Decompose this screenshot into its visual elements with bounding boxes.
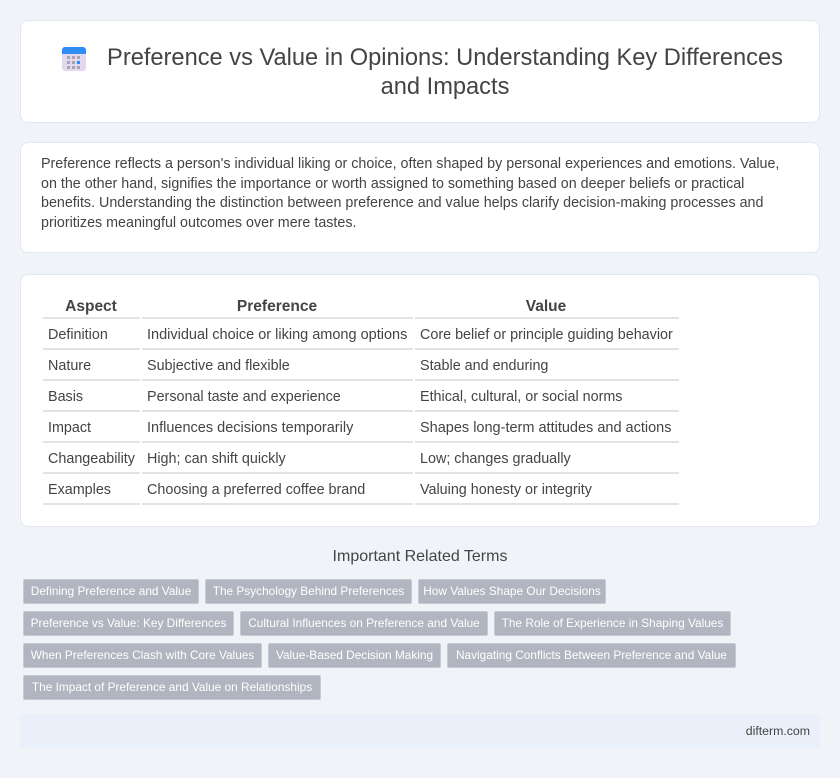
related term tags: When Preferences Clash with Core Values bbox=[31, 648, 254, 662]
intro text: on the other hand, signifies the importance or worth assigned to something based on deeper beliefs or practical bbox=[41, 176, 744, 192]
comparison table: Personal taste and experience bbox=[147, 389, 341, 405]
comparison table: Basis bbox=[48, 389, 83, 405]
comparison table: Low; changes gradually bbox=[420, 451, 571, 467]
related term tags: Preference vs Value: Key Differences bbox=[31, 616, 226, 630]
comparison table bbox=[43, 298, 679, 505]
related term tags: The Role of Experience in Shaping Values bbox=[502, 616, 723, 630]
comparison table: Changeability bbox=[48, 451, 135, 467]
table header: Value: Value bbox=[526, 298, 566, 315]
comparison table: Core belief or principle guiding behavior bbox=[420, 327, 673, 343]
comparison table panel bbox=[20, 274, 820, 527]
related terms heading: Important Related Terms bbox=[333, 548, 507, 565]
related term tags bbox=[23, 579, 736, 700]
intro panel bbox=[20, 142, 820, 253]
row: Definition: Definition bbox=[48, 327, 108, 343]
icon: calendar bbox=[62, 47, 86, 71]
comparison table: Shapes long-term attitudes and actions bbox=[420, 420, 671, 436]
related term tags: Defining Preference and Value bbox=[31, 584, 191, 598]
comparison table: Nature bbox=[48, 358, 91, 374]
footer source text: difterm.com bbox=[746, 724, 810, 738]
related term tags: How Values Shape Our Decisions bbox=[423, 584, 601, 598]
comparison table: Choosing a preferred coffee brand bbox=[147, 482, 365, 498]
table header: Aspect: Aspect bbox=[65, 298, 117, 315]
comparison table: Examples bbox=[48, 482, 111, 498]
intro text: prioritizes meaningful outcomes over mere tastes. bbox=[41, 215, 356, 231]
related term tags: The Psychology Behind Preferences bbox=[213, 584, 404, 598]
table header: Preference: Preference bbox=[237, 298, 317, 315]
comparison table: Impact bbox=[48, 420, 91, 436]
related term tags: Cultural Influences on Preference and Value bbox=[248, 616, 480, 630]
intro text bbox=[41, 156, 779, 231]
footer bar bbox=[20, 714, 820, 748]
title: Preference vs Value in Opinions: Understanding Key Differences and Impacts bbox=[107, 45, 783, 100]
comparison table: Influences decisions temporarily bbox=[147, 420, 353, 436]
comparison table: Valuing honesty or integrity bbox=[420, 482, 592, 498]
comparison table: Stable and enduring bbox=[420, 358, 548, 374]
comparison table: High; can shift quickly bbox=[147, 451, 286, 467]
comparison table: Individual choice or liking among options bbox=[147, 327, 407, 343]
related term tags: Value-Based Decision Making bbox=[276, 648, 433, 662]
comparison table: Subjective and flexible bbox=[147, 358, 290, 374]
related term tags: The Impact of Preference and Value on Relationships bbox=[32, 680, 312, 694]
related term tags: Navigating Conflicts Between Preference and Value bbox=[456, 648, 727, 662]
comparison table: Ethical, cultural, or social norms bbox=[420, 389, 622, 405]
intro text: Preference reflects a person's individual liking or choice, often shaped by personal experiences and emotions. Value, bbox=[41, 156, 779, 172]
header panel bbox=[20, 20, 820, 123]
intro text: benefits. Understanding the distinction between preference and value helps clarify decision-making processes and bbox=[41, 195, 763, 211]
